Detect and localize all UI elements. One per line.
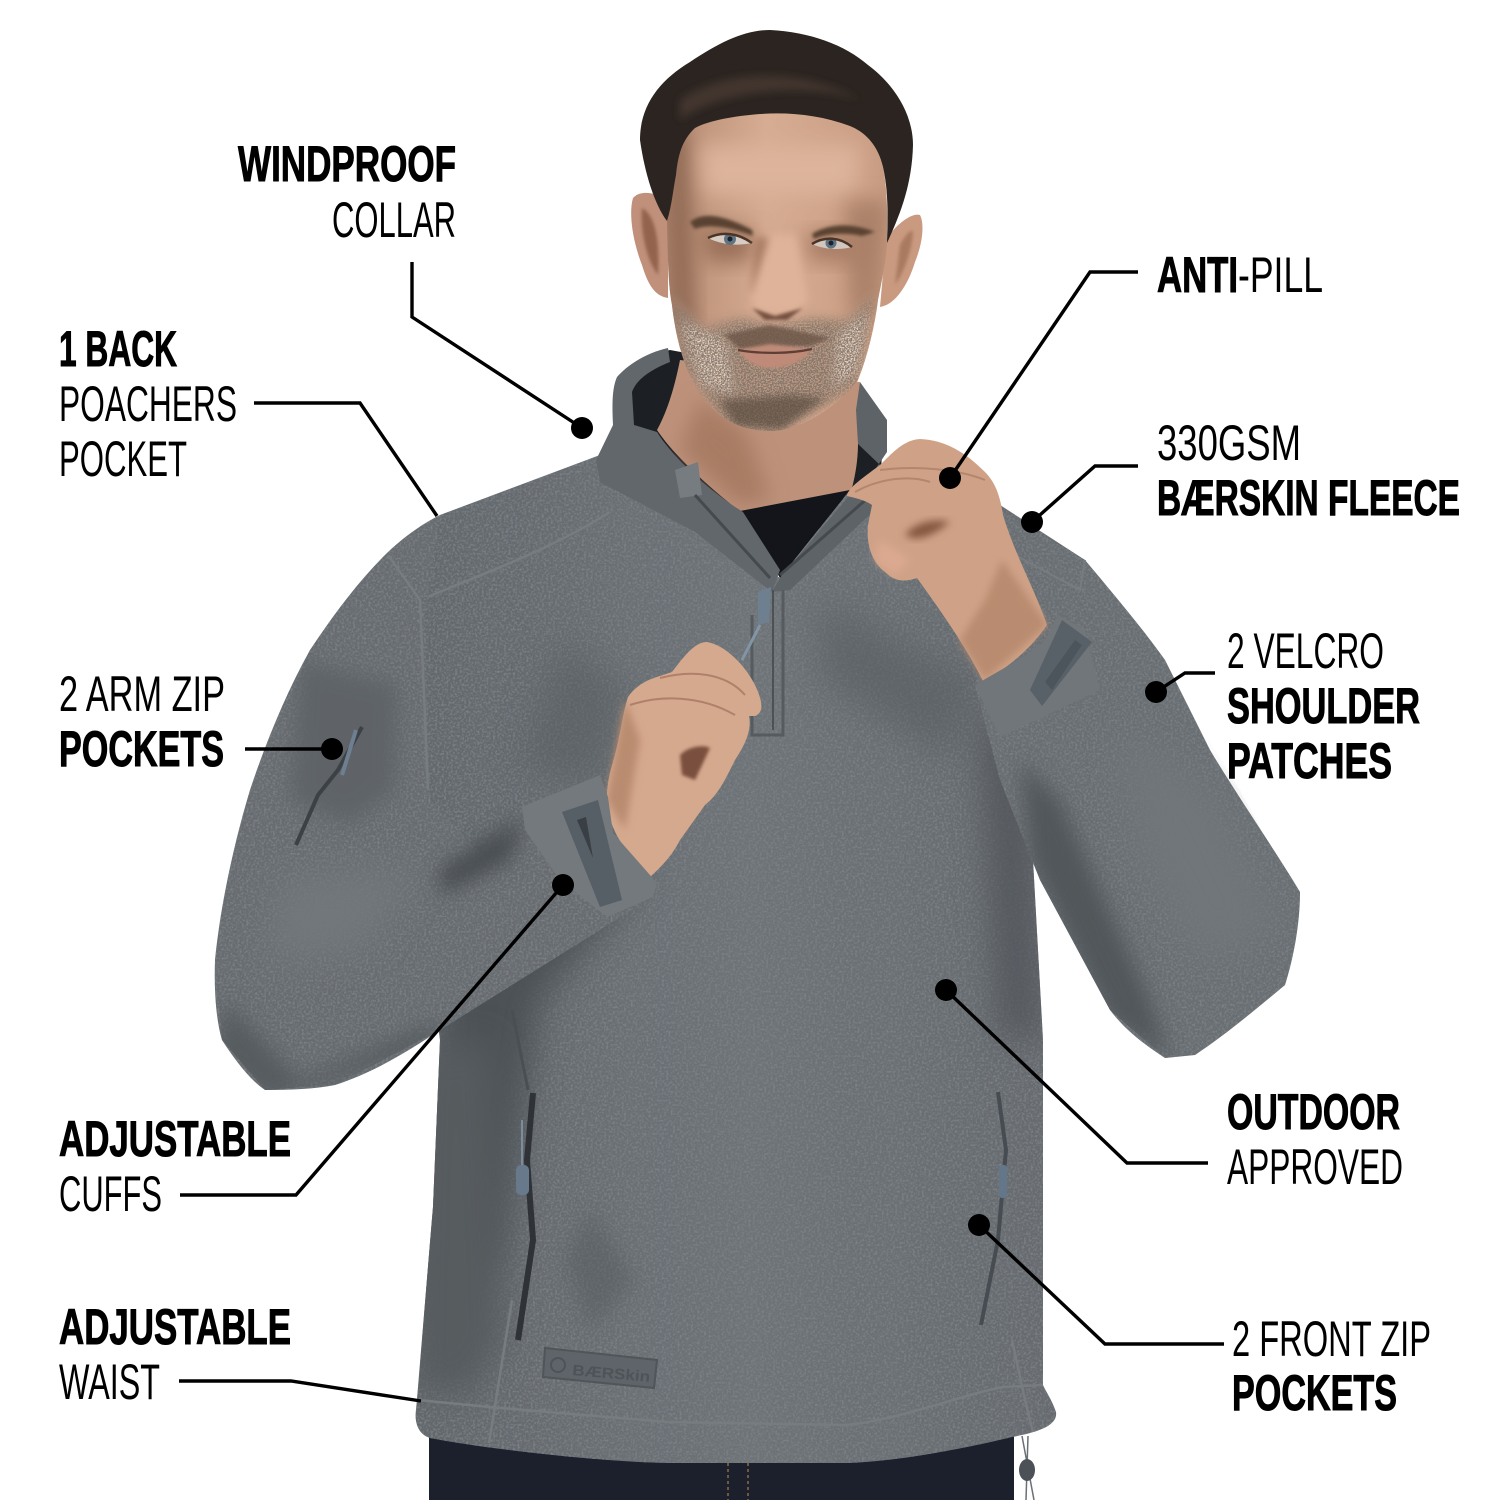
jeans [429,1430,1014,1500]
nose [750,235,808,320]
ears [631,193,922,307]
label: anti-pill: ANTI [1157,247,1238,303]
label: 2 front zip pockets: POCKETS [1232,1365,1397,1421]
label: 2 velcro shoulder patches: 2 VELCRO [1227,623,1384,679]
fleece body [400,455,1100,1463]
leader: adjustable cuffs [180,874,574,1195]
label: 330gsm baerskin fleece [1157,415,1460,526]
label: 2 front zip pockets [1232,1311,1431,1421]
mouth [738,344,812,368]
label: 1 back poachers pocket: POACHERS [59,376,237,432]
right sleeve [975,510,1300,1060]
label: 330gsm baerskin fleece: 330GSM [1157,415,1301,471]
label: anti-pill: -PILL [1238,247,1323,303]
front left zip pocket [512,1010,533,1340]
leader: front zip pockets [968,1214,1224,1344]
label: adjustable cuffs: CUFFS [59,1166,162,1222]
leader: windproof collar [412,262,593,439]
label: 2 arm zip pockets: 2 ARM ZIP [59,666,225,722]
black t-shirt [740,490,850,578]
label: windproof collar: WINDPROOF [238,136,456,192]
arm zip pocket [296,727,362,845]
label: outdoor approved: OUTDOOR [1227,1084,1400,1140]
leader: poachers pocket [254,403,437,516]
leader: fleece [1021,466,1138,533]
eyes and brows [690,216,875,249]
leader: anti-pill [939,272,1138,489]
neck shading [680,400,770,505]
leader: adjustable waist [179,1381,421,1401]
collar interior [625,350,885,560]
chest and hem stitching [418,512,1043,1443]
left cuff and strap [522,775,657,917]
logo patch [543,1348,657,1388]
head [631,30,922,435]
label: adjustable cuffs [59,1111,291,1222]
leader: outdoor approved [935,979,1208,1163]
label: adjustable waist: WAIST [59,1354,160,1410]
right cuff and strap [975,615,1100,737]
label: adjustable waist: ADJUSTABLE [59,1299,291,1355]
face [667,100,887,431]
leader: shoulder patches [1145,673,1215,703]
label: 1 back poachers pocket: POCKET [59,431,187,487]
hair [640,30,913,243]
label: adjustable cuffs: ADJUSTABLE [59,1111,291,1167]
neck [657,360,860,514]
raised hand on collar [847,439,1047,681]
label: 1 back poachers pocket: 1 BACK [59,321,177,377]
label: outdoor approved: APPROVED [1227,1139,1403,1195]
collar flaps [596,348,895,592]
label: windproof collar [238,136,456,248]
label: 2 velcro shoulder patches: SHOULDER [1227,678,1420,734]
left sleeve [215,515,653,1100]
logo patch: BÆRSkin [572,1362,651,1386]
raised hand on zip [607,642,761,880]
label: 2 velcro shoulder patches: PATCHES [1227,733,1392,789]
label: adjustable waist [59,1299,291,1410]
label: 2 arm zip pockets: POCKETS [59,721,224,777]
front right zip pocket [981,1092,1007,1325]
leader: arm zip pockets [245,738,343,760]
label: 2 arm zip pockets [59,666,225,777]
drawcord toggle [1019,1436,1035,1500]
label: 2 velcro shoulder patches [1227,623,1420,789]
zip placket and puller [742,587,783,735]
label: windproof collar: COLLAR [332,192,456,248]
label: outdoor approved [1227,1084,1403,1195]
figure: man wearing grey fleece [215,30,1300,1500]
label: 1 back poachers pocket [59,321,237,487]
